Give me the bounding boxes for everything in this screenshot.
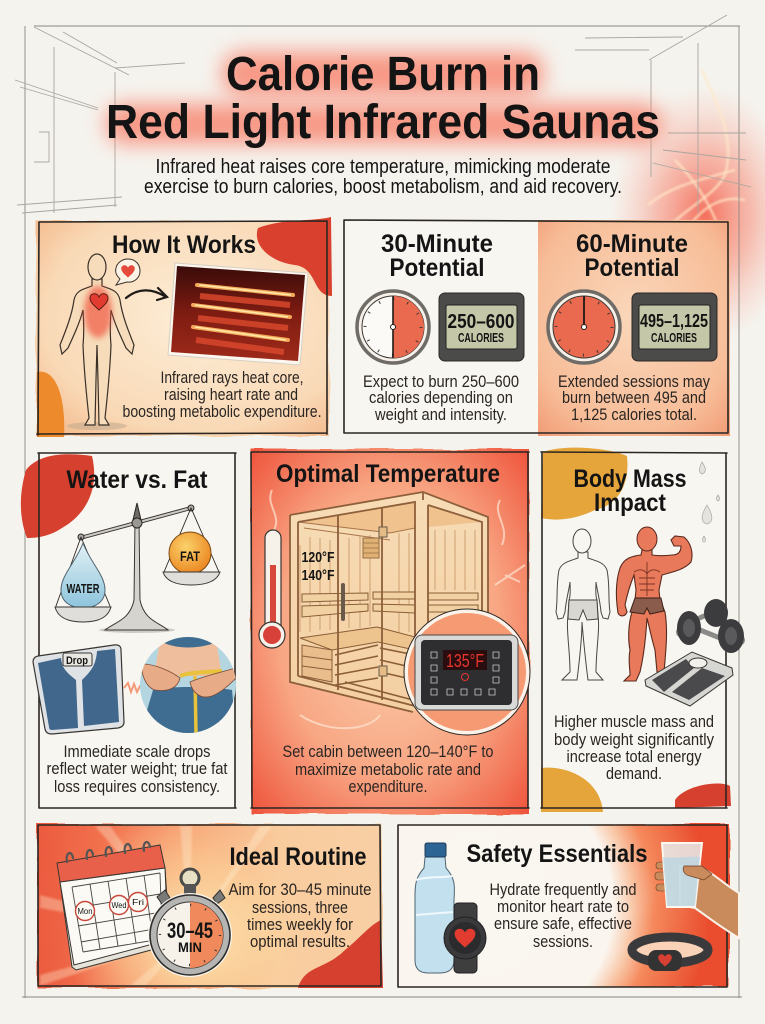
title: Red Light Infrared Saunas [106, 96, 660, 149]
heading: how it works: How It Works [112, 231, 256, 259]
icon: infrared heater [168, 263, 308, 365]
icon: balance scale [55, 503, 220, 633]
stopwatch label [167, 918, 213, 955]
section: 60-minute [548, 230, 717, 424]
icon: calorie monitor 250-600: CALORIES [458, 331, 504, 345]
panel: optimal temperature [251, 449, 530, 814]
icon: heart rate chest strap [632, 937, 708, 971]
text: body mass impact [554, 712, 714, 783]
text: 60-minute [558, 372, 710, 424]
text: water vs fat: reflect water weight; true fat [46, 759, 228, 778]
icon: fat blob: FAT [180, 548, 200, 564]
heading: optimal temperature: Optimal Temperature [276, 460, 500, 488]
icon: water bottle [415, 843, 454, 973]
panel: how it works [36, 217, 332, 437]
text: body mass impact: increase total energy [566, 747, 702, 766]
arrow to heater [126, 288, 167, 300]
text: ideal routine: sessions, three [252, 898, 348, 917]
icon: smartwatch [444, 903, 486, 973]
text: safety essentials: sessions. [533, 932, 593, 951]
heading: 30-minute: Potential [390, 254, 484, 282]
icon: bathroom scale [33, 645, 124, 734]
text: 60-minute: 1,125 calories total. [571, 405, 697, 424]
heading: body mass impact: Impact [594, 489, 667, 517]
panel: ideal routine [37, 824, 383, 988]
icon: stopwatch [148, 869, 232, 977]
highlighted days [76, 892, 148, 920]
text: 30-minute: calories depending on [369, 388, 513, 407]
heading: body mass impact [574, 465, 686, 517]
title: Calorie Burn in [226, 48, 540, 101]
icon: heart speech bubble [116, 259, 140, 285]
heading: 60-minute: 60-Minute [576, 230, 688, 258]
icon: weighing scale [645, 652, 733, 706]
heading: safety essentials: Safety Essentials [466, 840, 648, 868]
text: optimal temperature: maximize metabolic rate and [295, 760, 481, 779]
icon: fat blob [169, 532, 211, 574]
icon: muscular figure flexing [616, 527, 692, 681]
panel: water vs fat [21, 453, 236, 808]
text: how it works: boosting metabolic expenditure. [122, 402, 322, 421]
heading: water vs fat: Water vs. Fat [66, 466, 208, 494]
text: ideal routine: times weekly for [247, 915, 353, 934]
icon: dumbbells [676, 599, 745, 653]
text: body mass impact: body weight significantly [554, 730, 714, 749]
text: how it works: raising heart rate and [164, 385, 298, 404]
text: safety essentials [490, 880, 636, 951]
icon: water drop: WATER [66, 581, 100, 596]
text: 60-minute: burn between 495 and [562, 388, 706, 407]
text: how it works: Infrared rays heat core, [160, 368, 304, 387]
icon: full clock [548, 291, 620, 363]
heading: 30-minute: 30-Minute [381, 230, 493, 258]
highlighted days: Wed [112, 901, 126, 910]
text: ideal routine: Aim for 30–45 minute [228, 880, 372, 899]
heading: 30-minute [381, 230, 493, 282]
text: safety essentials: Hydrate frequently and [490, 880, 636, 899]
subtitle: Infrared heat raises core temperature, mimicking moderate [156, 156, 610, 178]
heat swirls [270, 490, 525, 728]
icon: thermometer [259, 530, 285, 648]
subtitle: exercise to burn calories, boost metabolism, and aid recovery. [144, 176, 622, 198]
text: 30-minute: Expect to burn 250–600 [363, 372, 519, 391]
stopwatch label: MIN [178, 939, 202, 955]
icon: calorie monitor 495-1,125: 495–1,125 [640, 311, 708, 331]
text: safety essentials: ensure safe, effective [494, 914, 632, 933]
text: how it works [122, 368, 322, 421]
icon: calorie monitor 495-1,125: CALORIES [651, 331, 697, 345]
text: 30-minute [363, 372, 519, 424]
temperature labels: 120°F [302, 549, 334, 566]
heading: ideal routine: Ideal Routine [230, 843, 367, 871]
icon: lean figure [556, 529, 610, 680]
icon: calorie monitor 250-600 [439, 293, 524, 361]
icon: human body with glowing heart [60, 254, 134, 430]
text: ideal routine: optimal results. [250, 932, 350, 951]
text: 30-minute: weight and intensity. [374, 405, 507, 424]
heading: body mass impact: Body Mass [574, 465, 686, 493]
temperature labels: 140°F [302, 567, 334, 584]
icon: bathroom scale: Drop [66, 655, 88, 667]
subtitle [144, 156, 622, 198]
text: water vs fat: loss requires consistency. [54, 777, 220, 796]
squiggle arrow [124, 683, 145, 692]
icon: waist with measuring tape [140, 634, 236, 734]
text: 60-minute: Extended sessions may [558, 372, 710, 391]
panel: 30 and 60 minute potential [344, 220, 730, 436]
text: water vs fat: Immediate scale drops [64, 742, 210, 761]
icon: hand holding water glass [655, 843, 739, 938]
temperature labels [302, 549, 334, 584]
heading: 60-minute [576, 230, 688, 282]
icon: digital control panel [404, 609, 530, 735]
stopwatch label: 30–45 [167, 918, 213, 943]
text: optimal temperature: expenditure. [348, 777, 428, 796]
icon: water drop [61, 543, 105, 608]
section: 30-minute [357, 230, 524, 424]
highlighted days: Mon [78, 907, 92, 916]
text: ideal routine [228, 880, 372, 951]
icon: digital control panel: 135°F [446, 651, 484, 671]
water droplets [699, 462, 720, 542]
heading: 60-minute: Potential [584, 254, 680, 282]
illustration: sauna cabin [290, 492, 488, 712]
text: body mass impact: demand. [606, 764, 662, 783]
icon: calendar [57, 842, 170, 970]
icon: calorie monitor 250-600: 250–600 [448, 311, 514, 333]
icon: calorie monitor 495-1,125 [632, 293, 717, 361]
icon: half-filled clock [357, 291, 429, 363]
highlighted days: Fri [132, 898, 144, 907]
text: body mass impact: Higher muscle mass and [554, 712, 714, 731]
text: optimal temperature [282, 742, 494, 796]
text: optimal temperature: Set cabin between 120–140°F to [282, 742, 494, 761]
text: water vs fat [46, 742, 228, 796]
title [106, 48, 662, 149]
panel: body mass impact [541, 448, 745, 812]
panel: safety essentials [398, 824, 739, 987]
text: safety essentials: monitor heart rate to [497, 897, 629, 916]
corner red glow with light streaks [610, 70, 765, 345]
